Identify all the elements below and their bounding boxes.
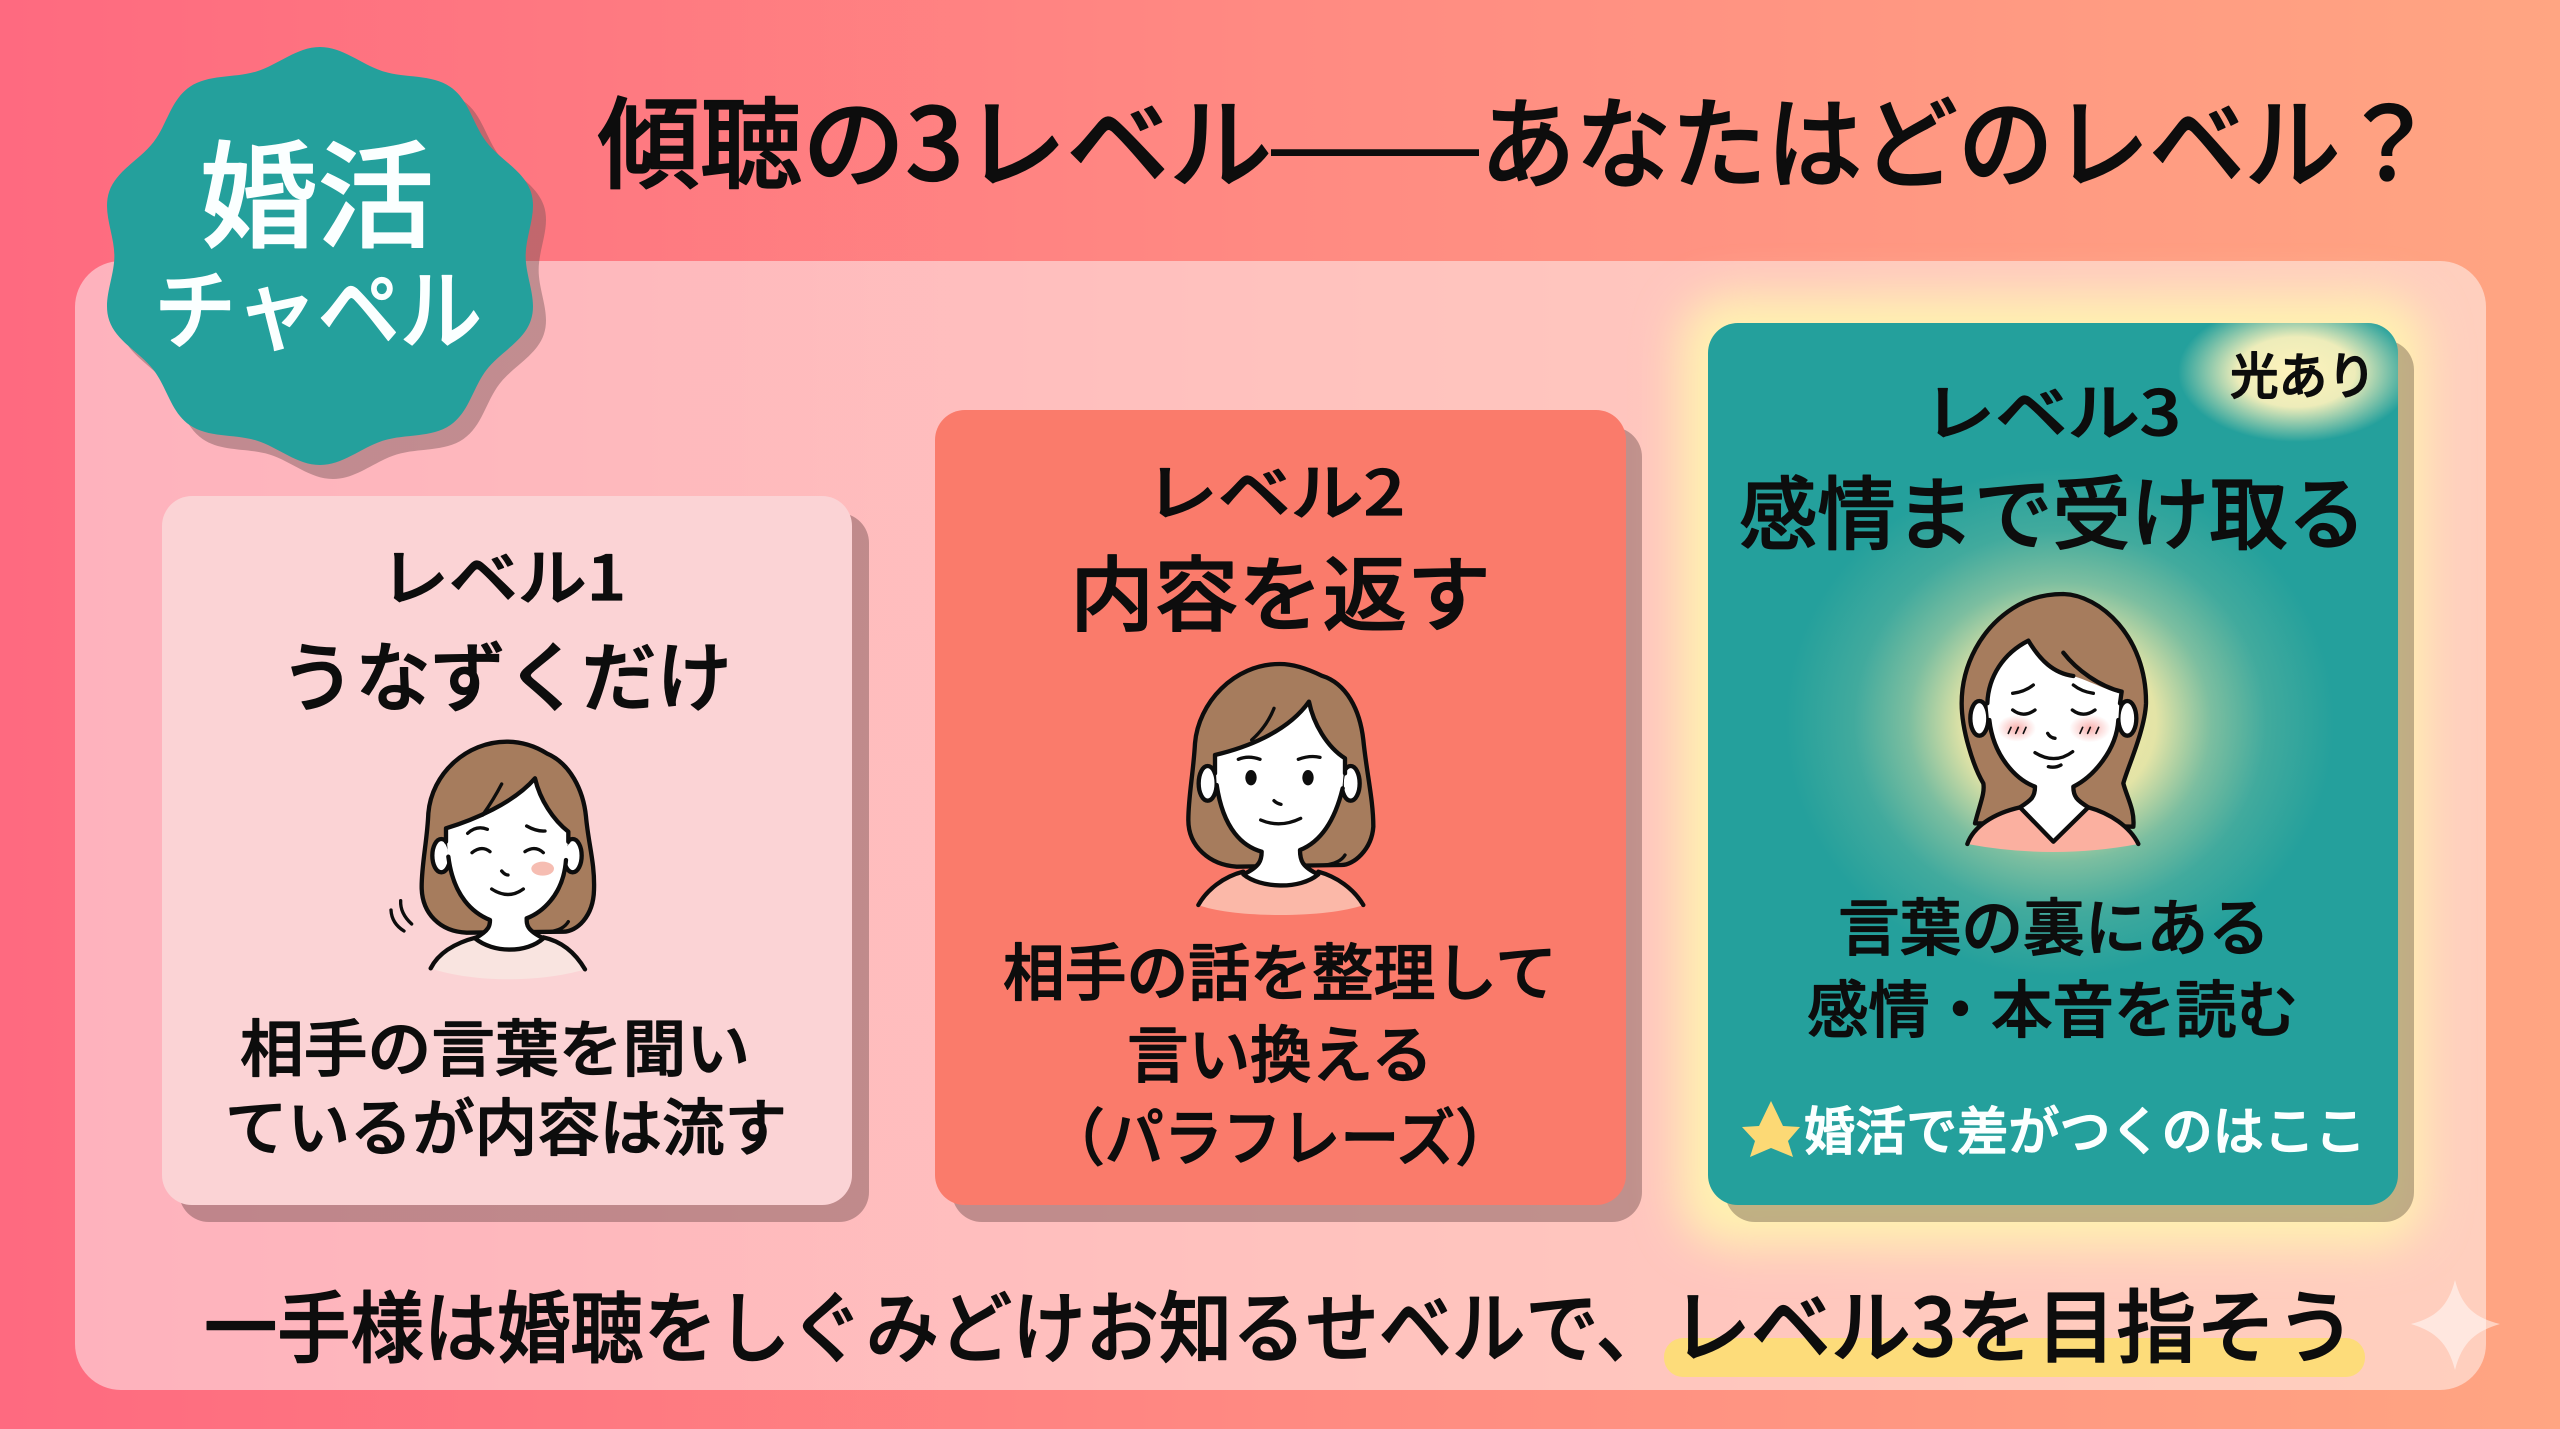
icon: woman with closed eyes bbox=[1962, 594, 2146, 852]
level 3 description: 感情・本音を読む bbox=[1807, 977, 2298, 1046]
badge: 婚活チャペル: 婚活 bbox=[200, 133, 434, 263]
title bbox=[597, 64, 2436, 209]
level 1 description bbox=[225, 1016, 787, 1164]
bottom message: 一手様は婚聴をしぐみどけお知るせベルで、 bbox=[204, 1285, 1669, 1373]
level 1 description: ているが内容は流す bbox=[225, 1095, 787, 1164]
icon: neutral woman bbox=[1188, 664, 1373, 915]
panel: level 3 card bbox=[1680, 296, 2425, 1246]
icon: nodding woman bbox=[391, 742, 594, 979]
level 2 description: 相手の話を整理して bbox=[1003, 940, 1557, 1009]
level 1 name: うなずくだけ bbox=[280, 637, 732, 722]
level 1 heading: レベル 1 bbox=[380, 528, 626, 618]
glow tag: 光あり bbox=[2230, 349, 2376, 405]
icon: sparkle bbox=[2411, 1280, 2500, 1370]
title: —— bbox=[1271, 88, 1479, 200]
level 2 description: （パラフレーズ） bbox=[1046, 1105, 1514, 1174]
level 1 description: 相手の言葉を聞い bbox=[240, 1016, 750, 1085]
level 3 description bbox=[1807, 895, 2298, 1046]
level 2 heading: レベル 2 bbox=[1145, 443, 1405, 533]
level 2 description: 言い換える bbox=[1127, 1022, 1433, 1091]
level 3 heading: レベル 3 bbox=[1923, 363, 2181, 453]
badge: 婚活チャペル: チャペル bbox=[154, 262, 482, 361]
bottom message bbox=[204, 1264, 2365, 1380]
panel: level 1 card bbox=[162, 496, 869, 1222]
level 3 name: 感情まで受け取る bbox=[1739, 471, 2366, 560]
level 3 description: 言葉の裏にある bbox=[1838, 895, 2270, 964]
highlight bar bbox=[1664, 1338, 2365, 1377]
badge: 婚活チャペル bbox=[107, 47, 546, 479]
level 2 description bbox=[1003, 940, 1557, 1174]
bottom message: レベル3を目指そう bbox=[1671, 1264, 2356, 1380]
panel: main background bbox=[75, 261, 2486, 1390]
level 2 name: 内容を返す bbox=[1070, 551, 1491, 642]
title: 傾聴の3レベル bbox=[597, 64, 1272, 209]
icon: star bbox=[1742, 1101, 1800, 1157]
panel: level 2 card bbox=[935, 410, 1642, 1222]
level 3 note: 婚活で差がつくのはここ bbox=[1804, 1104, 2366, 1162]
title: あなたはどのレベル？ bbox=[1480, 90, 2436, 202]
